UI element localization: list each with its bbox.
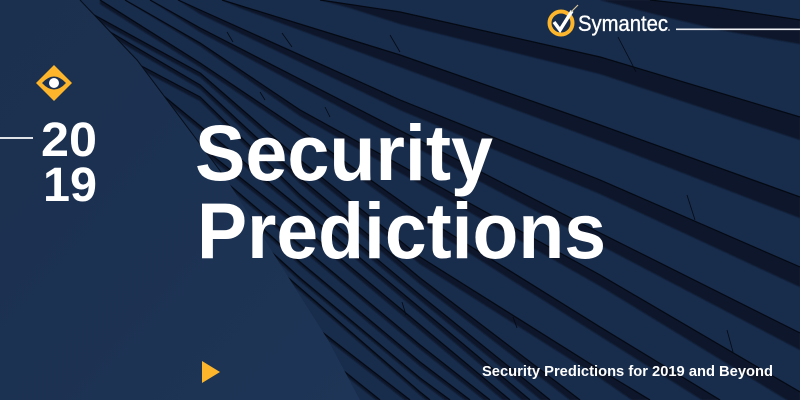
left plain panel bbox=[0, 0, 360, 400]
year bbox=[41, 114, 97, 212]
header rule bbox=[676, 28, 800, 30]
title: Predictions bbox=[197, 186, 606, 275]
subtitle: Security Predictions for 2019 and Beyond bbox=[482, 363, 773, 380]
logo: Symantec bbox=[550, 5, 670, 36]
divider line to year bbox=[0, 137, 33, 139]
icon: diamond eye bbox=[36, 65, 72, 101]
year: 20 bbox=[41, 114, 97, 167]
icon: play triangle bbox=[202, 361, 220, 383]
year: 19 bbox=[43, 159, 97, 212]
title: Security bbox=[195, 108, 493, 197]
logo: Symantec: Symantec bbox=[578, 11, 668, 36]
title bbox=[195, 108, 606, 275]
